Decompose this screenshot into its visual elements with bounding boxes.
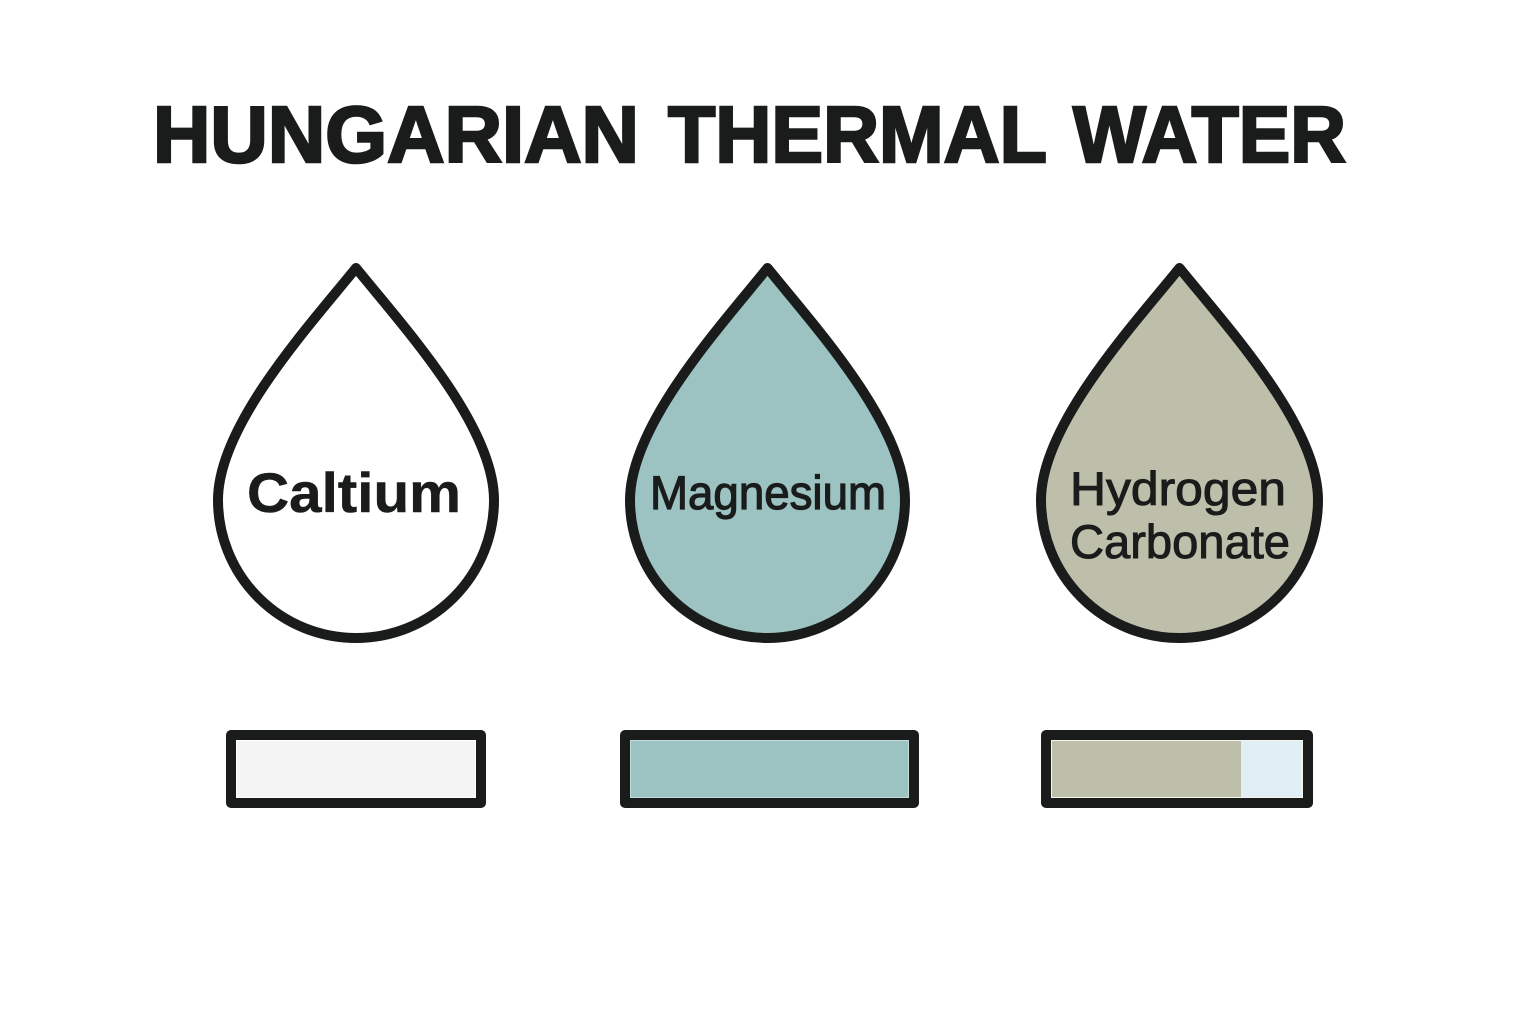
bar: calcium <box>226 730 486 808</box>
panel: hydrogen carbonate drop <box>1041 268 1318 638</box>
label: Caltium: Caltium <box>247 461 461 524</box>
title: HUNGARIAN <box>153 90 639 179</box>
label: Hydrogen Carbonate: Carbonate <box>1070 515 1290 568</box>
panel: magnesium drop <box>630 268 905 638</box>
panel: calcium drop <box>218 268 494 638</box>
icon: teal water drop <box>630 268 905 638</box>
bar: magnesium <box>620 730 919 808</box>
label: Hydrogen Carbonate <box>1070 462 1290 568</box>
title <box>153 90 1346 179</box>
icon: khaki water drop <box>1041 268 1318 638</box>
label: Hydrogen Carbonate: Hydrogen <box>1070 462 1286 515</box>
bar: hydrogen carbonate <box>1041 730 1313 808</box>
label: Magnesium: Magnesium <box>650 466 886 519</box>
title: WATER <box>1073 90 1346 179</box>
icon: white water drop <box>218 268 494 638</box>
title: THERMAL <box>668 90 1047 179</box>
